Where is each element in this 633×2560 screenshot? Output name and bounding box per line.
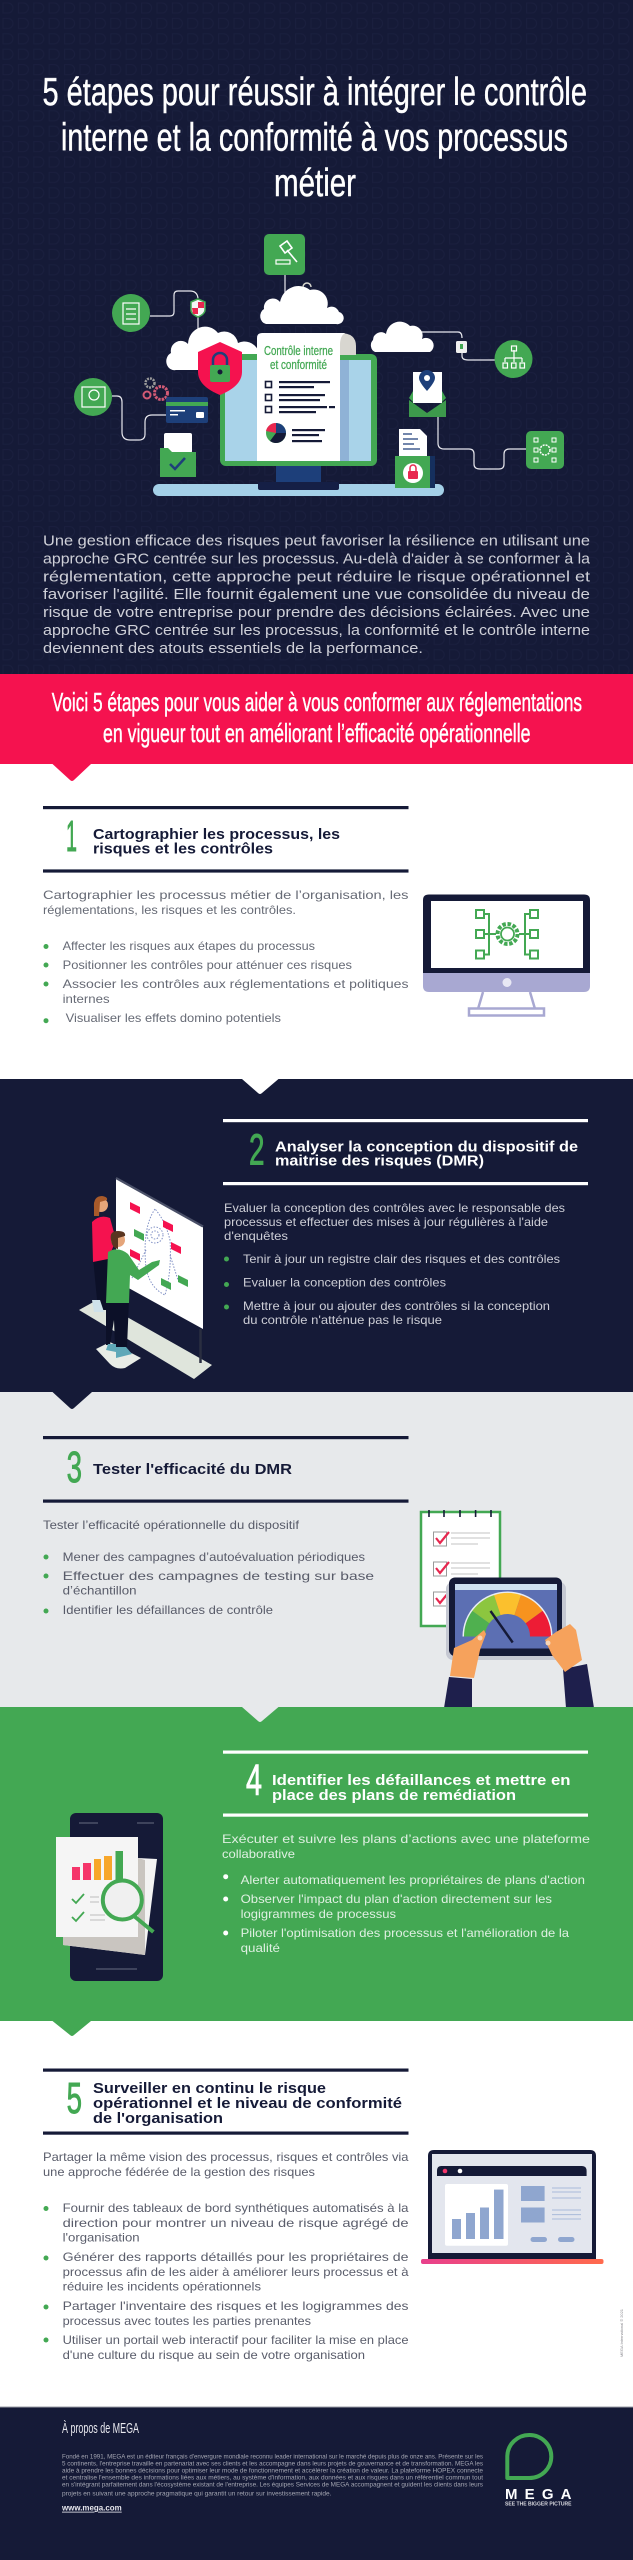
step 5 text: l'organisation — [63, 2231, 140, 2245]
gauge — [464, 1593, 552, 1642]
pie chart — [266, 423, 286, 443]
connector lines — [112, 275, 526, 469]
step 5 text: Utiliser un portail web interactif pour faciliter la mise en place — [63, 2333, 409, 2347]
icon: folder with check — [160, 433, 196, 477]
step 5 text: réduire les incidents opérationnels — [63, 2280, 261, 2294]
icon: gears — [144, 378, 168, 400]
icon: paper report: et conformité — [270, 358, 327, 372]
step 4 text: Observer l'impact du plan d'action directement sur les — [241, 1892, 552, 1906]
step 2 heading: Analyser la conception du dispositif de — [275, 1138, 578, 1156]
step 5 text: Partager la même vision des processus, risques et contrôles via — [43, 2150, 409, 2164]
logo: MEGA — [505, 2435, 572, 2508]
step 1 bullets — [44, 944, 48, 1023]
step 5 heading — [93, 2080, 402, 2127]
person: man — [106, 1231, 160, 1358]
step 1 text: Positionner les contrôles pour atténuer ces risques — [63, 958, 352, 972]
step 5 heading: Surveiller en continu le risque — [93, 2080, 326, 2097]
footer text: et centralise l'ensemble des informations liées aux métiers, au système d'information, aux données et aux risques dans un référentiel commun tout — [62, 2474, 483, 2481]
step 3 heading: Tester l'efficacité du DMR — [93, 1461, 292, 1478]
footer link: www.mega.com — [61, 2503, 122, 2513]
person: woman — [92, 1196, 116, 1312]
step 1 text: Visualiser les effets domino potentiels — [66, 1011, 281, 1025]
icon: red shield with lock — [198, 342, 242, 395]
step 5 text: une approche fédérée de la gestion des risques — [43, 2165, 315, 2179]
panel: step 1 — [43, 806, 590, 1025]
intro text: approche GRC centrée sur les processus. Au-delà d'aider à se conformer à la — [43, 551, 591, 567]
step 3 text: d’échantillon — [63, 1584, 136, 1598]
step 2 text: Evaluer la conception des contrôles avec le responsable des — [224, 1201, 565, 1215]
icon: gauge circle — [74, 378, 112, 416]
icon: credit card — [166, 397, 208, 423]
step 4 heading: Identifier les défaillances et mettre en — [272, 1772, 570, 1789]
step 1 text: réglementations, les risques et les contrôles. — [43, 903, 296, 917]
banner: red callout — [0, 674, 633, 781]
step number 3: 3 — [67, 1443, 82, 1492]
illustration: tablet with gauge and hands — [444, 1578, 594, 1708]
intro text: favoriser l'agilité. Elle fournit également une vue consolidée du niveau de — [43, 587, 590, 603]
step 4 text: Alerter automatiquement les propriétaires de plans d'action — [241, 1873, 585, 1887]
step 5 text: direction pour montrer un niveau de risque agrégé de — [63, 2216, 409, 2230]
intro text: deviennent des atouts essentiels de la performance. — [43, 641, 423, 657]
step 5 bullets — [44, 2206, 48, 2342]
title: métier — [274, 162, 356, 205]
step 1 heading: Cartographier les processus, les — [93, 826, 340, 843]
step 5 heading: opérationnel et le niveau de conformité — [93, 2095, 402, 2112]
step 5 text — [43, 2150, 409, 2362]
illustration: team at whiteboard — [79, 1178, 212, 1379]
intro text: Une gestion efficace des risques peut favoriser la résilience en utilisant une — [43, 534, 590, 550]
panel: header background — [0, 0, 633, 674]
step 2 heading: maitrise des risques (DMR) — [275, 1153, 484, 1170]
footer text: projets en suivant une approche pragmatique qui garantit un retour sur investissement rapide. — [62, 2490, 332, 2497]
step 4 text: collaborative — [222, 1847, 295, 1861]
step 3 text: Mener des campagnes d’autoévaluation périodiques — [63, 1550, 365, 1564]
step 2 text: processus et effectuer des mises à jour régulières à l'aide — [224, 1215, 548, 1229]
step 4 heading — [272, 1772, 570, 1804]
logo: MEGA: SEE THE BIGGER PICTURE — [505, 2502, 572, 2508]
step 5 text: Partager l'inventaire des risques et les logigrammes des — [63, 2299, 408, 2313]
step 2 text: Tenir à jour un registre clair des risques et des contrôles — [243, 1252, 560, 1266]
panel: section 1 background — [0, 764, 633, 1079]
step 4 text: Exécuter et suivre les plans d’actions avec une plateforme — [222, 1832, 590, 1846]
footer heading: À propos de MEGA — [62, 2420, 139, 2437]
title — [42, 71, 587, 205]
intro text — [43, 534, 591, 657]
step 4 bullets — [223, 1874, 228, 1936]
panel: footer — [0, 2406, 633, 2560]
panel: step 4 — [0, 1707, 633, 2021]
illustration: checklist notepad — [421, 1510, 500, 1626]
step 5 text: Fournir des tableaux de bord synthétiques automatisés à la — [63, 2201, 409, 2215]
step 1 text: Cartographier les processus métier de l’organisation, les — [43, 888, 408, 902]
step 2 text — [224, 1201, 565, 1327]
intro text: réglementation, cette approche peut réduire le risque opérationnel et — [43, 569, 590, 585]
step 2 text: Mettre à jour ou ajouter des contrôles si la conception — [243, 1299, 550, 1313]
step number 4: 4 — [246, 1756, 262, 1805]
icon: mini shield — [191, 299, 205, 317]
logo: MEGA: MEGA — [505, 2486, 572, 2503]
icon: locked folder with document — [395, 429, 435, 488]
icon: desktop monitor — [423, 894, 590, 1016]
footer text: 5 continents, l'entreprise travaille en partenariat avec ses clients et les accompagne dans leurs projets de gouvernance et de transformation. MEGA les — [62, 2460, 483, 2467]
icon: org chart circle — [456, 340, 532, 378]
step 2 text: d'enquêtes — [224, 1229, 288, 1243]
step 5 text: processus avec toutes les parties prenantes — [63, 2314, 311, 2328]
step 1 text: Affecter les risques aux étapes du processus — [63, 939, 315, 953]
intro text: risque de votre entreprise pour prendre des décisions éclairées. Avec une — [43, 605, 590, 621]
illustration: phone with report and magnifier — [56, 1813, 163, 1981]
step 4 text — [222, 1832, 590, 1955]
footer text — [62, 2453, 484, 2497]
step number 5: 5 — [67, 2074, 82, 2123]
intro text: approche GRC centrée sur les processus, la conformité et le contrôle interne — [43, 623, 590, 639]
vertical copyright: MEGA International © 2021 — [619, 2308, 624, 2357]
icon: process tile — [526, 431, 564, 469]
icon: gavel tile — [264, 234, 305, 275]
step 5 text: Générer des rapports détaillés pour les propriétaires de — [63, 2250, 409, 2264]
icon: clouds — [166, 286, 434, 370]
step 3 bullets — [44, 1554, 48, 1614]
step 3 text: Effectuer des campagnes de testing sur base — [63, 1569, 374, 1583]
step 4 text: logigrammes de processus — [241, 1907, 396, 1921]
step 1 heading: risques et les contrôles — [93, 840, 273, 858]
illustration: laptop dashboard — [421, 2150, 604, 2264]
icon: envelope with location pin — [409, 370, 446, 417]
step 1 text: Associer les contrôles aux réglementations et politiques — [63, 977, 408, 991]
icon: document circle — [112, 294, 150, 332]
hands — [444, 1677, 472, 1708]
step 1 heading — [93, 826, 340, 858]
step 5 text: processus afin de les aider à améliorer leurs processus et à — [63, 2265, 409, 2279]
step number 2: 2 — [249, 1126, 264, 1174]
step 1 text: internes — [63, 992, 110, 1006]
icon: paper report — [257, 333, 356, 461]
footer text: en s'intégrant parfaitement dans l'écosystème existant de l'entreprise. Les équipes Services de MEGA accompagnent et guident les clients dans leurs — [62, 2481, 483, 2488]
step 2 heading — [275, 1138, 578, 1170]
icon: paper report: Contrôle interne — [264, 344, 333, 358]
step 3 text: Identifier les défaillances de contrôle — [63, 1603, 273, 1617]
step 2 text: du contrôle n'atténue pas le risque — [243, 1313, 442, 1327]
panel: step 1: 1 — [66, 812, 77, 861]
footer text: Fondé en 1991, MEGA est un éditeur français d'envergure mondiale reconnu leader international sur le marché depuis plus de onze ans. Présente sur les — [62, 2453, 483, 2460]
step 2 text: Evaluer la conception des contrôles — [243, 1276, 446, 1290]
step 4 text: Piloter l'optimisation des processus et l'amélioration de la — [241, 1926, 569, 1940]
step 5 text: d'une culture du risque au sein de votre organisation — [63, 2348, 365, 2362]
step 1 text — [43, 888, 408, 1025]
step 4 heading: place des plans de remédiation — [272, 1787, 516, 1804]
step 5 heading: de l'organisation — [93, 2110, 223, 2127]
panel: step 5 — [0, 2021, 633, 2407]
step 4 text: qualité — [241, 1941, 280, 1955]
panel: step 2 — [0, 1079, 633, 1392]
footer text: aide à prendre les bonnes décisions pour optimiser leur mode de fonctionnement et accélérer la création de valeur. La plateforme HOPEX connecte — [62, 2467, 484, 2474]
step 3 text — [43, 1518, 374, 1617]
step 2 bullets — [224, 1256, 229, 1310]
step 3 text: Tester l’efficacité opérationnelle du dispositif — [43, 1518, 300, 1532]
icon: monitor — [153, 354, 444, 496]
hero illustration: compliance monitor and cloud network — [74, 234, 564, 496]
panel: step 3 — [0, 1392, 633, 1708]
